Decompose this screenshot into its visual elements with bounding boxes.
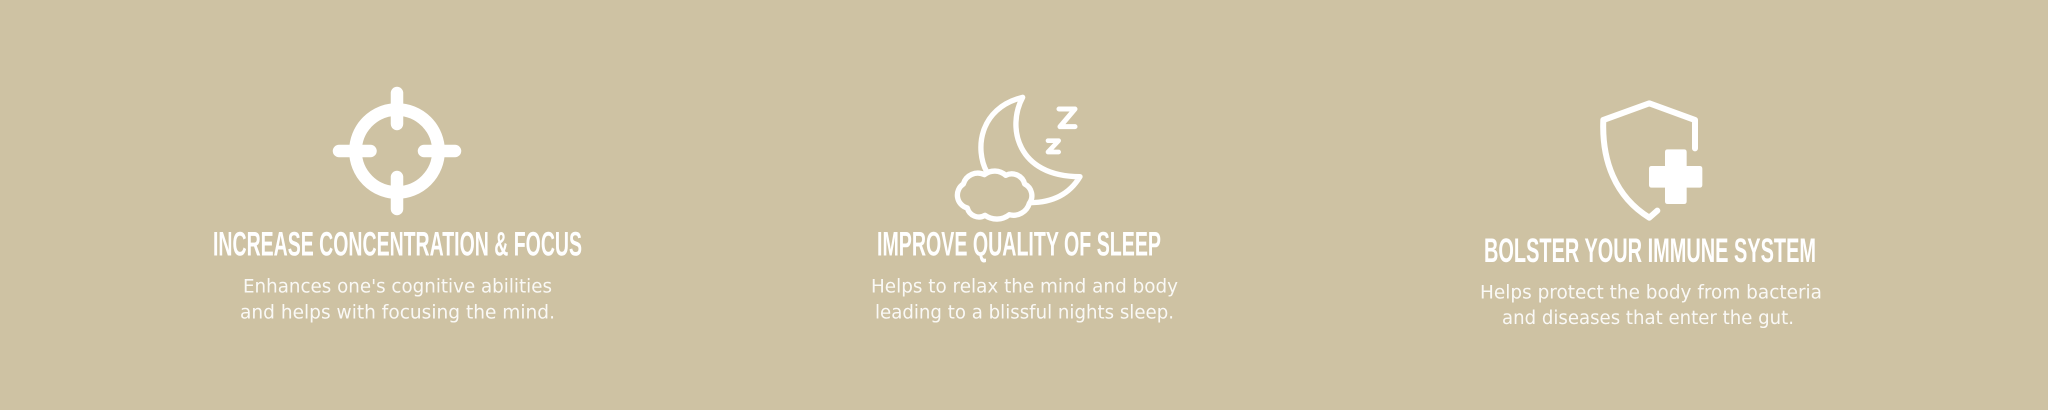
text block: immune description [1480,282,1822,329]
text block: sleep description [871,276,1178,324]
heading: bolster your immune system: BOLSTER YOUR IMMUNE SYSTEM [1484,232,1816,270]
text block: sleep description: leading to a blissful nights sleep. [875,302,1174,324]
panel: improve quality of sleep [871,97,1178,323]
heading: improve quality of sleep: IMPROVE QUALITY OF SLEEP [877,226,1161,264]
text block: immune description: Helps protect the body from bacteria [1480,282,1822,304]
panel: bolster your immune system [1480,103,1822,329]
text block: concentration description: Enhances one's cognitive abilities [243,276,552,298]
text block: concentration description: and helps with focusing the mind. [240,302,555,324]
text block: concentration description [240,276,555,324]
icon: shield with medical cross [1603,103,1702,218]
text block: immune description: and diseases that enter the gut. [1502,308,1794,329]
panel: increase concentration and focus [213,93,582,324]
text block: sleep description: Helps to relax the mind and body [871,276,1178,298]
heading: increase concentration and focus: INCREASE CONCENTRATION & FOCUS [213,226,582,264]
icon: crosshair target [339,93,455,209]
icon: moon, cloud and sleep letters [957,97,1080,219]
